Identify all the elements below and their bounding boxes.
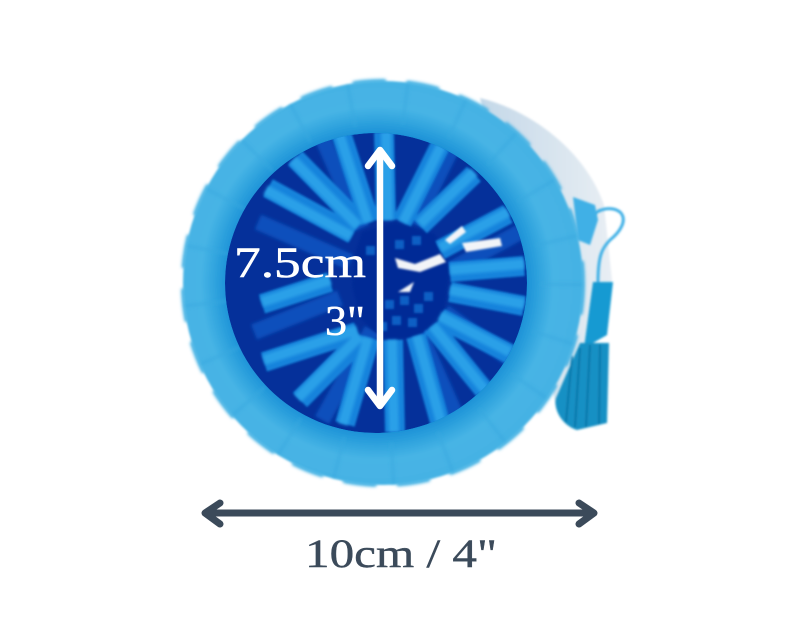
hanging strap [555, 209, 623, 430]
bristle highlights [262, 130, 524, 432]
dark bristle shadows [254, 128, 520, 420]
scalloped outer edge [183, 81, 583, 485]
rim face [183, 81, 583, 485]
hub teeth [366, 236, 433, 331]
dark interior [225, 133, 527, 433]
cup body behind the rim [480, 98, 612, 405]
blue rim of the cup [183, 81, 598, 485]
bristles base [262, 130, 524, 432]
rim segments [205, 103, 561, 463]
label: 3 inches: 3" [325, 299, 365, 345]
braided tassel [555, 343, 609, 430]
central hub [372, 262, 449, 337]
dark width arrow [205, 503, 594, 524]
clip tab on rim [573, 197, 598, 245]
strap tab [584, 282, 613, 348]
strap loop [590, 209, 623, 282]
brush interior [225, 128, 527, 433]
label: 10cm / 4 inches: 10cm / 4" [305, 531, 497, 576]
label: 7.5cm: 7.5cm [234, 240, 366, 287]
white gaps between bristles [395, 226, 502, 292]
infographic: paw cleaner cup dimensions [178, 76, 626, 568]
white height arrow [368, 150, 392, 406]
